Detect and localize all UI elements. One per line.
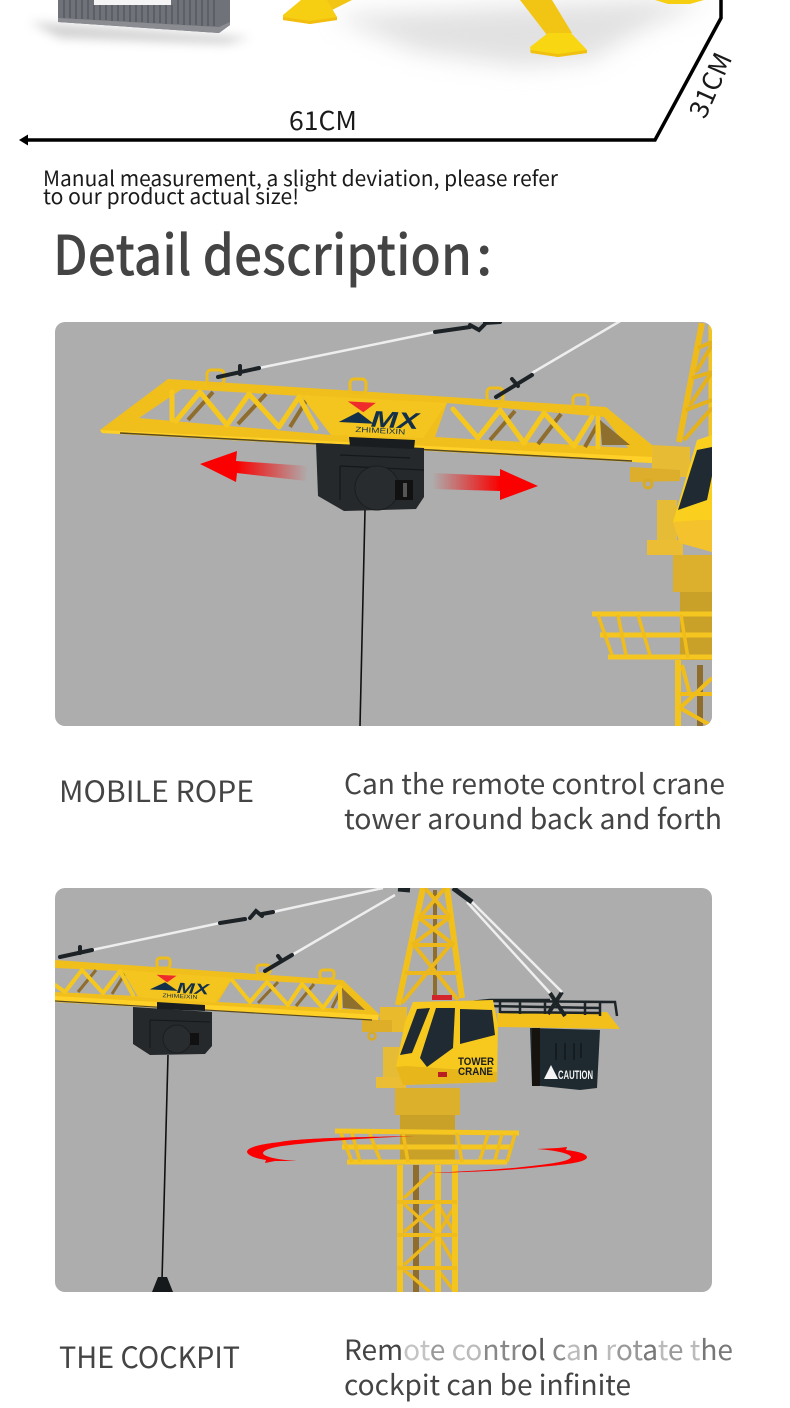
ZMX logo: ZHIMEIXIN (162, 993, 198, 1001)
support ropes and clamps (60, 888, 395, 971)
arrow: move left (200, 451, 308, 482)
upper mast body (395, 1088, 460, 1162)
description: mobile rope: tower around back and forth (344, 798, 722, 838)
hoist cable with weight (152, 1055, 173, 1292)
cockpit (396, 1000, 498, 1085)
ZMX logo (150, 974, 210, 999)
heading: Detail description: : (476, 211, 492, 291)
boom lifting loops (207, 370, 588, 409)
jib boom with truss (55, 960, 380, 1020)
ZMX logo: ZHIMEIXIN (355, 425, 406, 436)
dimension line: width and depth arrow (19, 0, 721, 146)
crane feet (283, 0, 704, 57)
caution triangle and label (544, 1065, 593, 1079)
ZMX logo: MX (176, 980, 211, 999)
boom lifting loops (157, 958, 334, 979)
description: cockpit: cockpit can be infinite (344, 1364, 631, 1404)
red rotation arrow: right (432, 1147, 587, 1173)
walkway railing (592, 614, 712, 658)
counter jib ropes (398, 888, 562, 993)
support ropes and clamps (218, 320, 622, 397)
counter jib and counterweight (470, 992, 620, 1090)
red rotation arrow: left (247, 1136, 415, 1163)
label: THE COCKPIT: THE COCKPIT (59, 1335, 240, 1377)
hoist trolley (133, 1002, 212, 1055)
label: MOBILE ROPE: MOBILE ROPE (59, 769, 254, 811)
hoist cable (360, 510, 365, 726)
dimension label: 31CM: 31CM (679, 46, 740, 123)
cockpit edge (673, 435, 712, 552)
jib boom with truss (100, 379, 652, 463)
jib connector (362, 1007, 407, 1088)
measurement note: to our product actual size! (43, 181, 299, 211)
cockpit: TOWER (458, 1056, 494, 1068)
panel: cockpit photo (55, 888, 712, 1292)
ZMX logo: MX (370, 406, 422, 434)
description: cockpit: Remote control can rotate the (344, 1329, 733, 1369)
lower mast lattice (397, 1165, 457, 1292)
ZMX logo (338, 401, 422, 437)
hoist trolley (316, 437, 424, 511)
measurement note: Manual measurement, a slight deviation, please refer (43, 163, 559, 193)
dimension label: 61CM: 61CM (289, 101, 357, 138)
tower mast behind cab (630, 323, 712, 660)
panel: mobile rope photo (55, 320, 712, 726)
mast top lattice (398, 888, 462, 1005)
cockpit: CRANE (458, 1066, 493, 1078)
arrow: move right (432, 469, 538, 500)
description: mobile rope (344, 763, 725, 838)
caution triangle and label: CAUTION (558, 1068, 593, 1082)
description: cockpit (344, 1329, 733, 1404)
product photo: crane base and container cropped at top (30, 0, 710, 66)
lower mast lattice (675, 660, 712, 726)
description: mobile rope: Can the remote control crane (344, 763, 725, 803)
measurement note (43, 163, 559, 211)
heading: Detail description: Detail description (53, 211, 472, 291)
walkway railing (335, 1131, 519, 1162)
container block (58, 0, 230, 33)
